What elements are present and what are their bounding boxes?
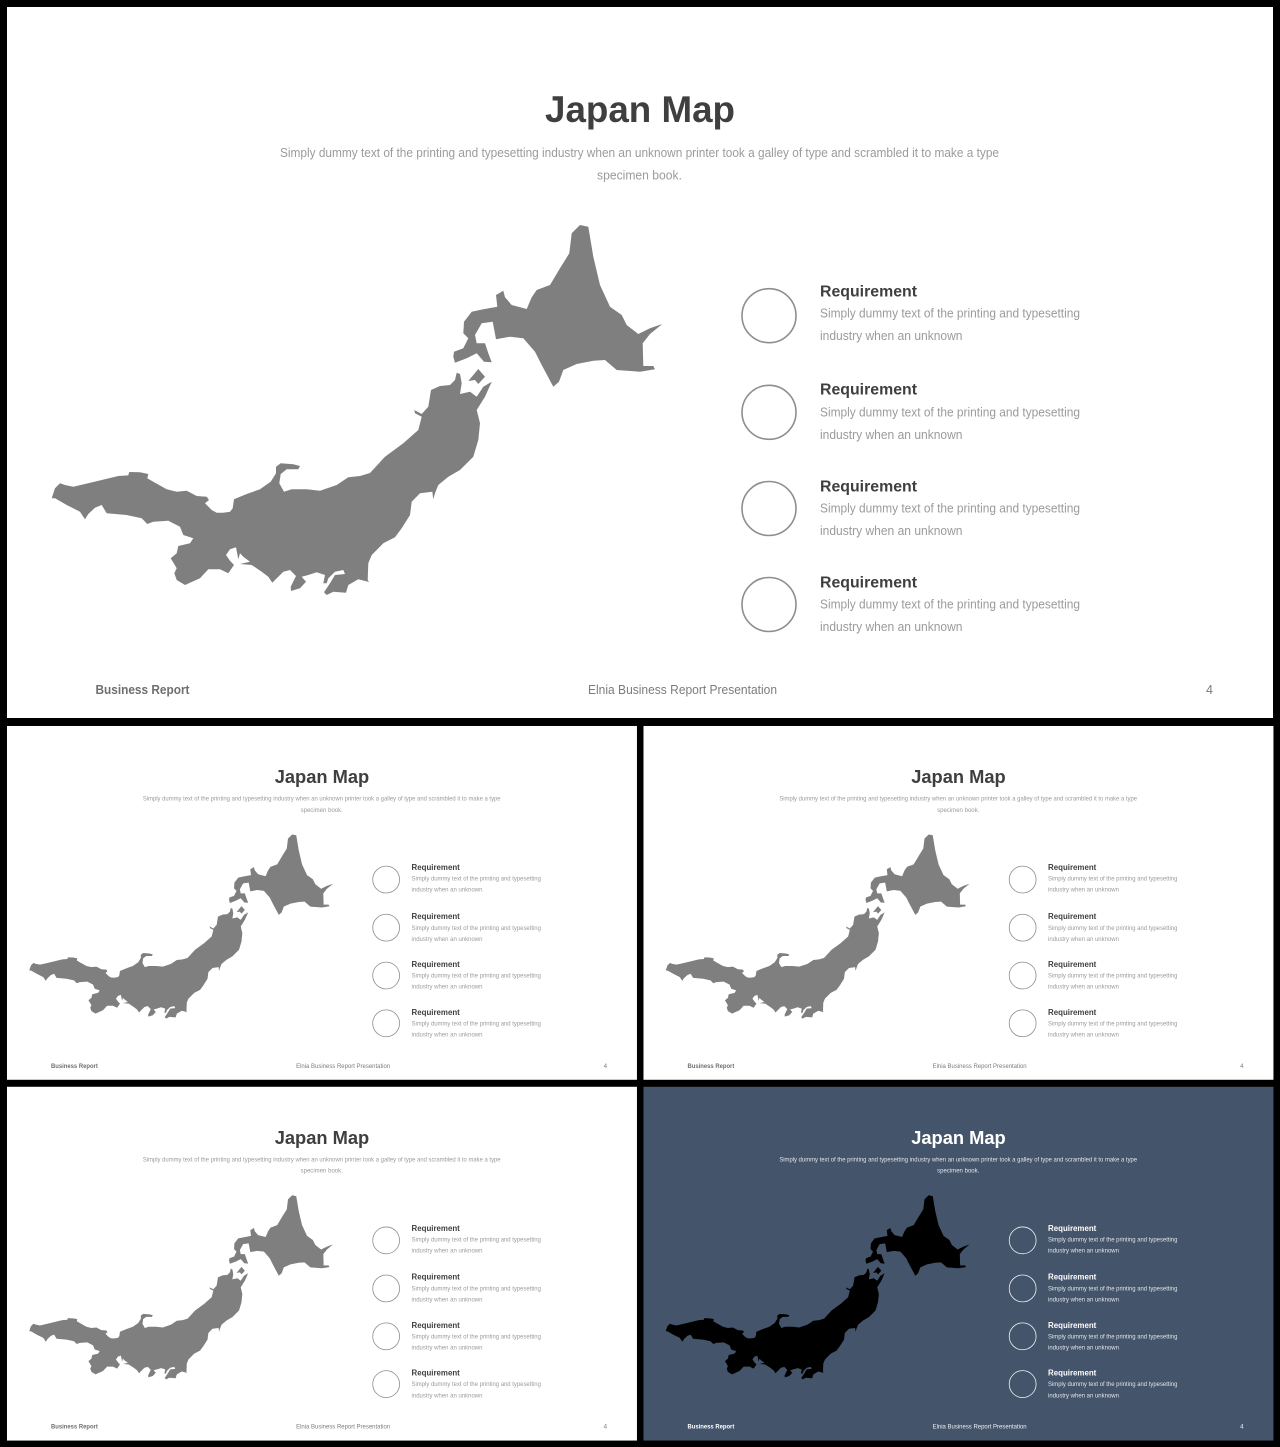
thumbnail subtitle: Simply dummy text of the printing and typesetting industry when an unknown printer took a galley of type and scrambled it to make a type xyxy=(143,1156,501,1163)
thumbnail subtitle: Simply dummy text of the printing and typesetting industry when an unknown printer took a galley of type and scrambled it to make a type xyxy=(143,796,501,803)
thumbnail items: industry when an unknown xyxy=(1048,984,1119,991)
thumbnail items: Simply dummy text of the printing and typesetting xyxy=(1048,973,1178,980)
thumbnail footer: 4 xyxy=(604,1063,608,1070)
thumbnail items: Requirement xyxy=(412,863,460,872)
thumbnail items: Simply dummy text of the printing and typesetting xyxy=(1048,925,1178,932)
thumbnail items xyxy=(1009,1224,1178,1399)
thumbnail items: industry when an unknown xyxy=(412,887,483,894)
item 4: Requirement xyxy=(820,574,918,592)
thumbnail items: Requirement xyxy=(1048,1224,1097,1233)
item 3: Simply dummy text of the printing and typesetting xyxy=(820,502,1080,516)
panel: thumbnail top left xyxy=(7,726,637,1080)
thumbnail subtitle xyxy=(779,1156,1138,1175)
panel: main slide xyxy=(7,7,1273,718)
thumbnail subtitle xyxy=(143,1156,501,1175)
thumbnail subtitle xyxy=(779,796,1138,814)
thumbnail footer: Elnia Business Report Presentation xyxy=(933,1424,1027,1431)
thumbnail items: industry when an unknown xyxy=(1048,887,1119,894)
thumbnail footer: Business Report xyxy=(51,1063,98,1070)
thumbnail footer: 4 xyxy=(604,1424,608,1431)
thumbnail items: industry when an unknown xyxy=(412,984,483,991)
thumbnail items: Simply dummy text of the printing and typesetting xyxy=(1048,875,1178,882)
thumbnail items: industry when an unknown xyxy=(1048,1031,1119,1038)
thumbnail items: industry when an unknown xyxy=(1048,936,1119,943)
subtitle: specimen book. xyxy=(597,168,682,182)
footer: Business Report xyxy=(96,683,190,697)
thumbnail items: Requirement xyxy=(1048,1008,1097,1017)
thumbnail items: Simply dummy text of the printing and typesetting xyxy=(412,1286,541,1293)
thumbnail items: Simply dummy text of the printing and typesetting xyxy=(412,1020,541,1027)
thumbnail items: industry when an unknown xyxy=(1048,1392,1119,1399)
thumbnail subtitle: Simply dummy text of the printing and typesetting industry when an unknown printer took a galley of type and scrambled it to make a type xyxy=(779,796,1138,803)
thumbnail footer: Business Report xyxy=(688,1424,734,1431)
thumbnail footer: Elnia Business Report Presentation xyxy=(933,1063,1027,1070)
thumbnail footer xyxy=(688,1063,1244,1070)
thumbnail items xyxy=(373,1224,541,1399)
thumbnail items: Simply dummy text of the printing and typesetting xyxy=(1048,1020,1178,1027)
thumbnail items: Requirement xyxy=(412,1224,460,1233)
thumbnail items: Requirement xyxy=(1048,912,1097,921)
footer xyxy=(96,683,1213,697)
thumbnail items: industry when an unknown xyxy=(1048,1247,1119,1254)
thumbnail items: Requirement xyxy=(412,1008,460,1017)
thumbnail subtitle xyxy=(143,796,501,814)
item 2 xyxy=(742,382,1080,442)
thumbnail map xyxy=(666,834,970,1019)
footer: Elnia Business Report Presentation xyxy=(588,683,777,697)
thumbnail title: Japan Map xyxy=(275,766,369,787)
thumbnail footer xyxy=(51,1424,608,1431)
item 1: industry when an unknown xyxy=(820,329,963,343)
thumbnail subtitle: Simply dummy text of the printing and typesetting industry when an unknown printer took a galley of type and scrambled it to make a type xyxy=(779,1156,1138,1163)
thumbnail map xyxy=(29,834,333,1019)
thumbnail title: Japan Map xyxy=(275,1127,369,1148)
thumbnail subtitle: specimen book. xyxy=(937,807,980,814)
subtitle xyxy=(280,146,999,182)
item 2: industry when an unknown xyxy=(820,428,963,442)
thumbnail items: Requirement xyxy=(1048,1273,1097,1282)
thumbnail items: industry when an unknown xyxy=(412,1031,483,1038)
panel: thumbnail top right xyxy=(643,726,1273,1080)
thumbnail items: industry when an unknown xyxy=(1048,1297,1119,1304)
thumbnail items: industry when an unknown xyxy=(412,936,483,943)
thumbnail items: Requirement xyxy=(412,960,460,969)
thumbnail items: industry when an unknown xyxy=(1048,1345,1119,1352)
thumbnail items xyxy=(1009,863,1178,1038)
thumbnail items: Simply dummy text of the printing and typesetting xyxy=(412,973,541,980)
thumbnail items: Requirement xyxy=(412,1273,460,1282)
thumbnail footer: Elnia Business Report Presentation xyxy=(296,1063,391,1070)
footer: 4 xyxy=(1206,683,1213,697)
item 4 xyxy=(742,574,1080,634)
thumbnail items: industry when an unknown xyxy=(412,1297,483,1304)
thumbnail items: Requirement xyxy=(1048,1369,1097,1378)
thumbnail items: industry when an unknown xyxy=(412,1345,483,1352)
panel: thumbnail bottom left xyxy=(7,1087,637,1441)
item 2: Requirement xyxy=(820,382,918,398)
thumbnail title: Japan Map xyxy=(911,1127,1006,1148)
item 1 xyxy=(742,284,1080,343)
thumbnail items: industry when an unknown xyxy=(412,1392,483,1399)
item 3 xyxy=(742,478,1080,538)
thumbnail subtitle: specimen book. xyxy=(937,1168,980,1175)
thumbnail footer xyxy=(51,1063,608,1070)
item 3: Requirement xyxy=(820,478,918,496)
thumbnail items: Simply dummy text of the printing and typesetting xyxy=(412,1381,541,1388)
thumbnail subtitle: specimen book. xyxy=(301,807,343,814)
thumbnail items: Simply dummy text of the printing and typesetting xyxy=(1048,1333,1178,1340)
thumbnail items: Simply dummy text of the printing and typesetting xyxy=(412,1236,541,1243)
thumbnail map xyxy=(666,1195,970,1379)
thumbnail footer: 4 xyxy=(1240,1424,1244,1431)
thumbnail footer: 4 xyxy=(1240,1063,1244,1070)
thumbnail items: Simply dummy text of the printing and typesetting xyxy=(412,875,541,882)
thumbnail items: Requirement xyxy=(1048,1321,1097,1330)
thumbnail items: Requirement xyxy=(412,1369,460,1378)
map of Japan xyxy=(52,225,662,595)
thumbnail footer xyxy=(688,1424,1244,1431)
thumbnail items: Simply dummy text of the printing and typesetting xyxy=(412,925,541,932)
item 2: Simply dummy text of the printing and typesetting xyxy=(820,406,1080,420)
item 1: Requirement xyxy=(820,284,918,300)
item 4: industry when an unknown xyxy=(820,620,963,634)
thumbnail items: Requirement xyxy=(412,912,460,921)
thumbnail items: industry when an unknown xyxy=(412,1247,483,1254)
thumbnail items: Simply dummy text of the printing and typesetting xyxy=(1048,1236,1178,1243)
thumbnail items: Requirement xyxy=(1048,863,1097,872)
thumbnail items: Simply dummy text of the printing and typesetting xyxy=(1048,1286,1178,1293)
panel: thumbnail bottom right dark xyxy=(643,1087,1273,1441)
thumbnail footer: Elnia Business Report Presentation xyxy=(296,1424,391,1431)
thumbnail title: Japan Map xyxy=(911,766,1006,787)
thumbnail map xyxy=(29,1195,333,1379)
thumbnail footer: Business Report xyxy=(51,1424,98,1431)
thumbnail items xyxy=(373,863,541,1038)
item 3: industry when an unknown xyxy=(820,524,963,538)
item 1: Simply dummy text of the printing and typesetting xyxy=(820,306,1080,320)
thumbnail subtitle: specimen book. xyxy=(301,1168,343,1175)
title: Japan Map xyxy=(545,89,735,130)
thumbnail items: Simply dummy text of the printing and typesetting xyxy=(412,1333,541,1340)
item 4: Simply dummy text of the printing and typesetting xyxy=(820,598,1080,612)
thumbnail items: Requirement xyxy=(412,1321,460,1330)
thumbnail footer: Business Report xyxy=(688,1063,734,1070)
subtitle: Simply dummy text of the printing and typesetting industry when an unknown printer took a galley of type and scrambled it to make a type xyxy=(280,146,999,160)
thumbnail items: Requirement xyxy=(1048,960,1097,969)
thumbnail items: Simply dummy text of the printing and typesetting xyxy=(1048,1381,1178,1388)
